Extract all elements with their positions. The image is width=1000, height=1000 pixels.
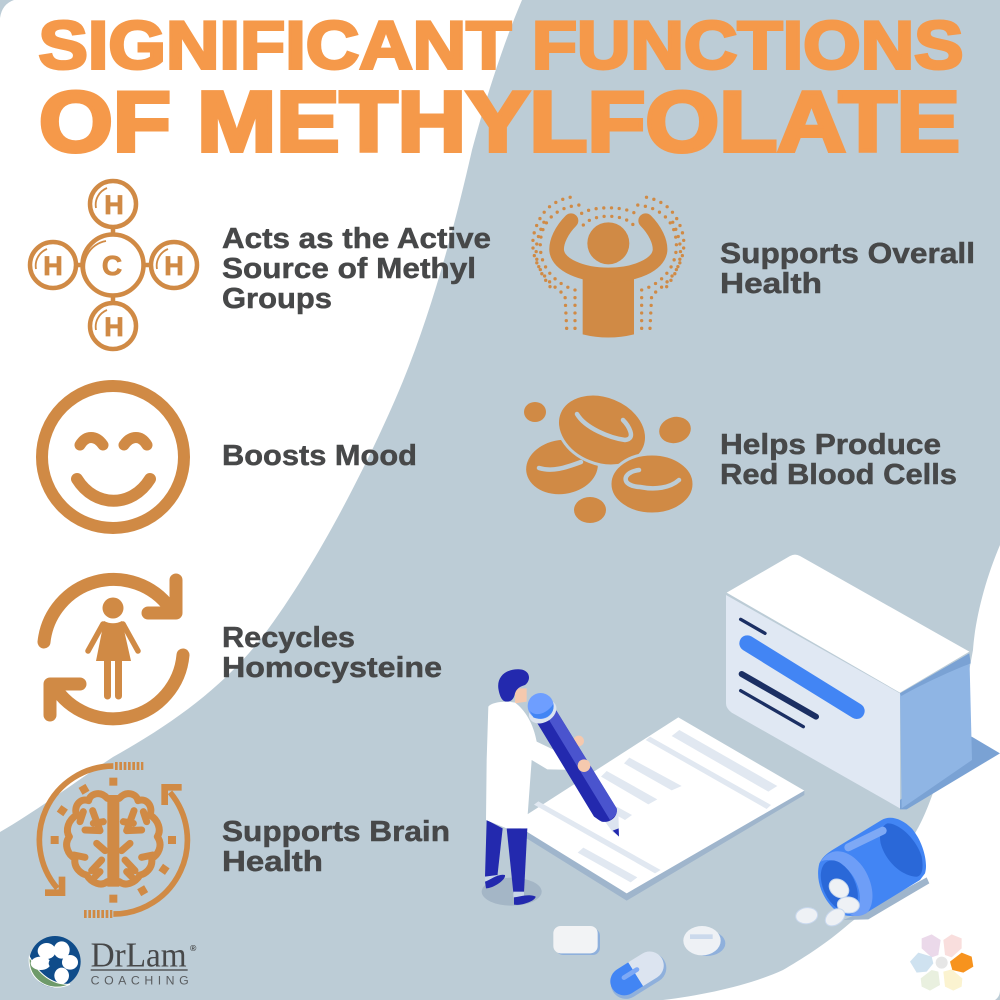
box shadow xyxy=(900,737,1000,809)
white background shape: top left xyxy=(0,0,522,832)
white background shape: bottom right xyxy=(663,545,1000,1000)
round pill xyxy=(683,926,725,956)
text: acts as the active source: Acts as the Active xyxy=(222,223,491,255)
paper with lines xyxy=(513,717,804,901)
text: recycles homocysteine: Recycles xyxy=(222,622,355,654)
icon: methane molecule: H xyxy=(164,251,184,281)
doctor figure xyxy=(482,669,584,906)
logo wordmark: ® xyxy=(190,943,197,953)
icon: recycling person xyxy=(44,579,183,719)
logo flower emblem xyxy=(29,936,81,987)
text: helps produce red blood cells: Red Blood Cells xyxy=(720,459,957,491)
illustration: spilled pill bottle xyxy=(795,818,929,929)
box side xyxy=(900,653,972,808)
illustration: medicine box xyxy=(726,555,1000,991)
hand xyxy=(578,759,590,772)
text: acts as the active source: Groups xyxy=(222,283,332,315)
text: supports brain health: Supports Brain xyxy=(222,816,450,848)
text: boosts mood: Boosts Mood xyxy=(222,440,417,472)
text: acts as the active source xyxy=(222,223,491,315)
icon: methane molecule: C xyxy=(102,250,122,281)
box front xyxy=(726,595,900,808)
text: acts as the active source: Source of Methyl xyxy=(222,253,476,285)
icon: methane molecule: H xyxy=(43,251,63,281)
text: supports brain health: Health xyxy=(222,846,323,878)
text: supports overall health xyxy=(720,238,975,300)
tablet pill xyxy=(553,926,600,955)
text: recycles homocysteine: Homocysteine xyxy=(222,652,442,684)
icon: smiley face xyxy=(42,386,184,528)
icon: methane molecule xyxy=(30,181,197,349)
text: recycles homocysteine xyxy=(222,622,442,684)
text: helps produce red blood cells xyxy=(720,429,957,491)
box label lines xyxy=(741,619,857,727)
capsule xyxy=(604,946,672,1000)
illustration: doctor writing on paper with pencil xyxy=(482,669,804,1000)
logo: DrLam Coaching xyxy=(29,936,197,987)
pencil xyxy=(525,693,619,837)
icon: red blood cells xyxy=(523,381,694,523)
icon: healthy person with dotted aura xyxy=(533,197,684,337)
flower mark xyxy=(910,934,973,991)
text: supports brain health xyxy=(222,816,450,878)
text: helps produce red blood cells: Helps Produce xyxy=(720,429,941,461)
icon: brain with arrows xyxy=(39,766,187,914)
title: OF METHYLFOLATE xyxy=(39,75,960,170)
title xyxy=(38,8,964,170)
box top xyxy=(727,555,969,693)
text: supports overall health: Supports Overall xyxy=(720,238,975,270)
icon: methane molecule: H xyxy=(104,190,124,220)
text: supports overall health: Health xyxy=(720,268,822,300)
title: SIGNIFICANT FUNCTIONS xyxy=(38,8,964,84)
logo wordmark: DrLam xyxy=(91,936,187,975)
icon: methane molecule: H xyxy=(104,312,124,342)
logo wordmark: COACHING xyxy=(91,973,189,987)
